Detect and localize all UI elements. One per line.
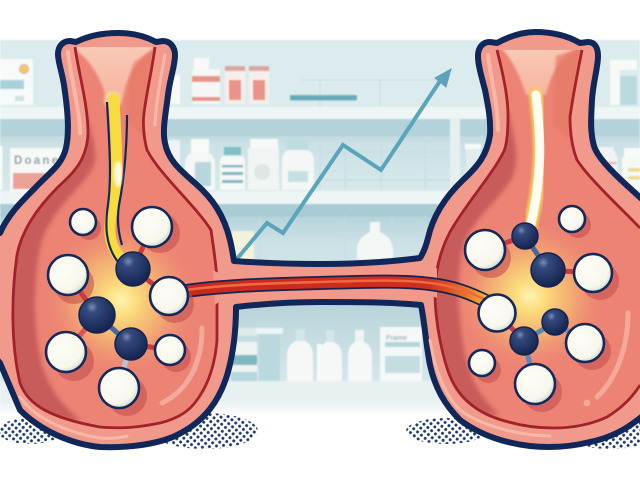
hydrogen atoms (465, 206, 612, 404)
hydrogen atoms (46, 207, 188, 408)
top row of medicine boxes and bottles (0, 58, 637, 105)
left neck highlight (76, 47, 154, 98)
left reaction glow (58, 237, 181, 364)
right curved highlight (597, 313, 628, 397)
left sparkle (114, 161, 122, 187)
left flask molecule (46, 207, 194, 416)
left inner shading (14, 116, 97, 420)
box label text: Doane (14, 155, 58, 167)
left flask interior (0, 40, 217, 428)
right reaction glow (468, 235, 592, 358)
box label text: Frame (386, 335, 407, 342)
atom shadows (471, 212, 619, 412)
middle row of medicine boxes and bottles (0, 139, 640, 191)
upper bottle behind connector and yellow box corner (232, 222, 393, 261)
carbon atoms (510, 223, 568, 355)
right neck highlight (501, 50, 576, 96)
left yellow signal strand (104, 91, 127, 262)
faint grid behind chart (260, 80, 450, 260)
bonds (66, 227, 170, 388)
arrowhead (435, 69, 451, 87)
shelf boards (0, 107, 640, 416)
halftone floor shadows (0, 413, 640, 449)
outer wall light stripes (20, 52, 550, 438)
rising trend line chart arrow (236, 69, 451, 260)
right flask molecule (465, 206, 619, 412)
atom shadows (54, 213, 194, 416)
right flask interior (430, 40, 640, 428)
right inner shading (430, 110, 516, 415)
left curved highlight (162, 328, 202, 403)
right glowing signal strand (529, 95, 540, 230)
connecting tube (186, 281, 490, 303)
carbon atoms (79, 252, 150, 360)
bonds (485, 236, 593, 384)
connector inner band (213, 268, 437, 305)
bottom row of medicine boxes and bottles (231, 327, 422, 381)
